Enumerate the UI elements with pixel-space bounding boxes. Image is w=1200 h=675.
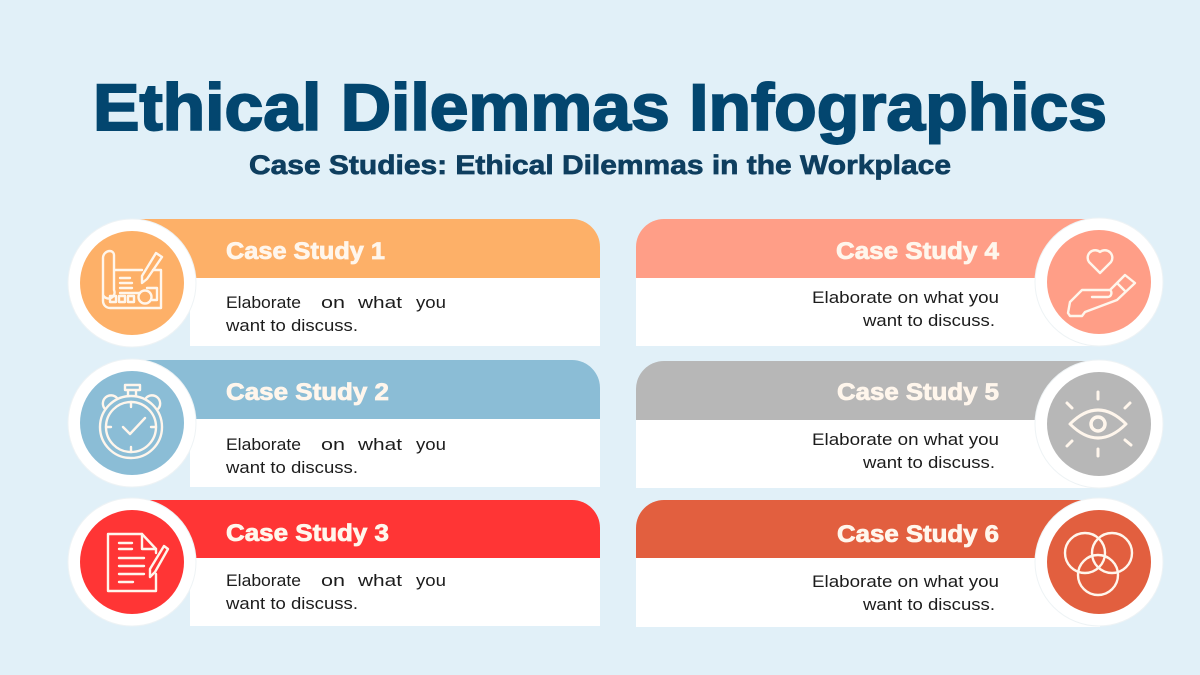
subtitle: Case Studies: Ethical Dilemmas in the Workplace — [249, 150, 951, 180]
text block: you — [416, 293, 446, 312]
panel: case study 1 — [68, 219, 600, 347]
text block: Elaborate — [226, 571, 301, 590]
heading: Case Study 4 — [836, 238, 999, 265]
heading: Case Study 3 — [226, 520, 389, 547]
text block: Elaborate — [226, 293, 301, 312]
text block: Elaborate on what you — [812, 430, 999, 449]
text block: on — [321, 571, 345, 590]
icon: overlapping circles — [1065, 533, 1132, 595]
panel: case study 6 — [636, 498, 1163, 627]
text block: want to discuss. — [862, 453, 995, 472]
text block: Elaborate — [226, 435, 301, 454]
text block: want to discuss. — [225, 594, 358, 613]
heading: Case Study 6 — [837, 521, 999, 548]
heading: Case Study 5 — [837, 379, 999, 406]
text block: what — [357, 293, 402, 312]
text block: want to discuss. — [862, 311, 995, 330]
panel: case study 3 — [68, 498, 600, 626]
heading: Case Study 2 — [226, 379, 389, 406]
text block: Elaborate on what you — [812, 572, 999, 591]
panel: case study 2 — [68, 359, 600, 487]
text block: want to discuss. — [225, 316, 358, 335]
text block: you — [416, 435, 446, 454]
panel: case study 5 — [636, 360, 1163, 488]
text block: want to discuss. — [862, 595, 995, 614]
heading: Case Study 1 — [226, 238, 385, 265]
text block: on — [321, 293, 345, 312]
icon: blueprint and pencil — [103, 251, 162, 308]
text block: Elaborate on what you — [812, 288, 999, 307]
icon: stopwatch — [100, 385, 162, 458]
panel: case study 4 — [636, 218, 1163, 346]
text block: you — [416, 571, 446, 590]
icon: document and pencil — [108, 534, 168, 591]
text block: what — [357, 435, 402, 454]
icon: hand holding heart — [1068, 250, 1135, 316]
icon: eye — [1067, 392, 1131, 456]
text block: what — [357, 571, 402, 590]
text block: want to discuss. — [225, 458, 358, 477]
text block: on — [321, 435, 345, 454]
title: Ethical Dilemmas Infographics — [93, 70, 1107, 144]
